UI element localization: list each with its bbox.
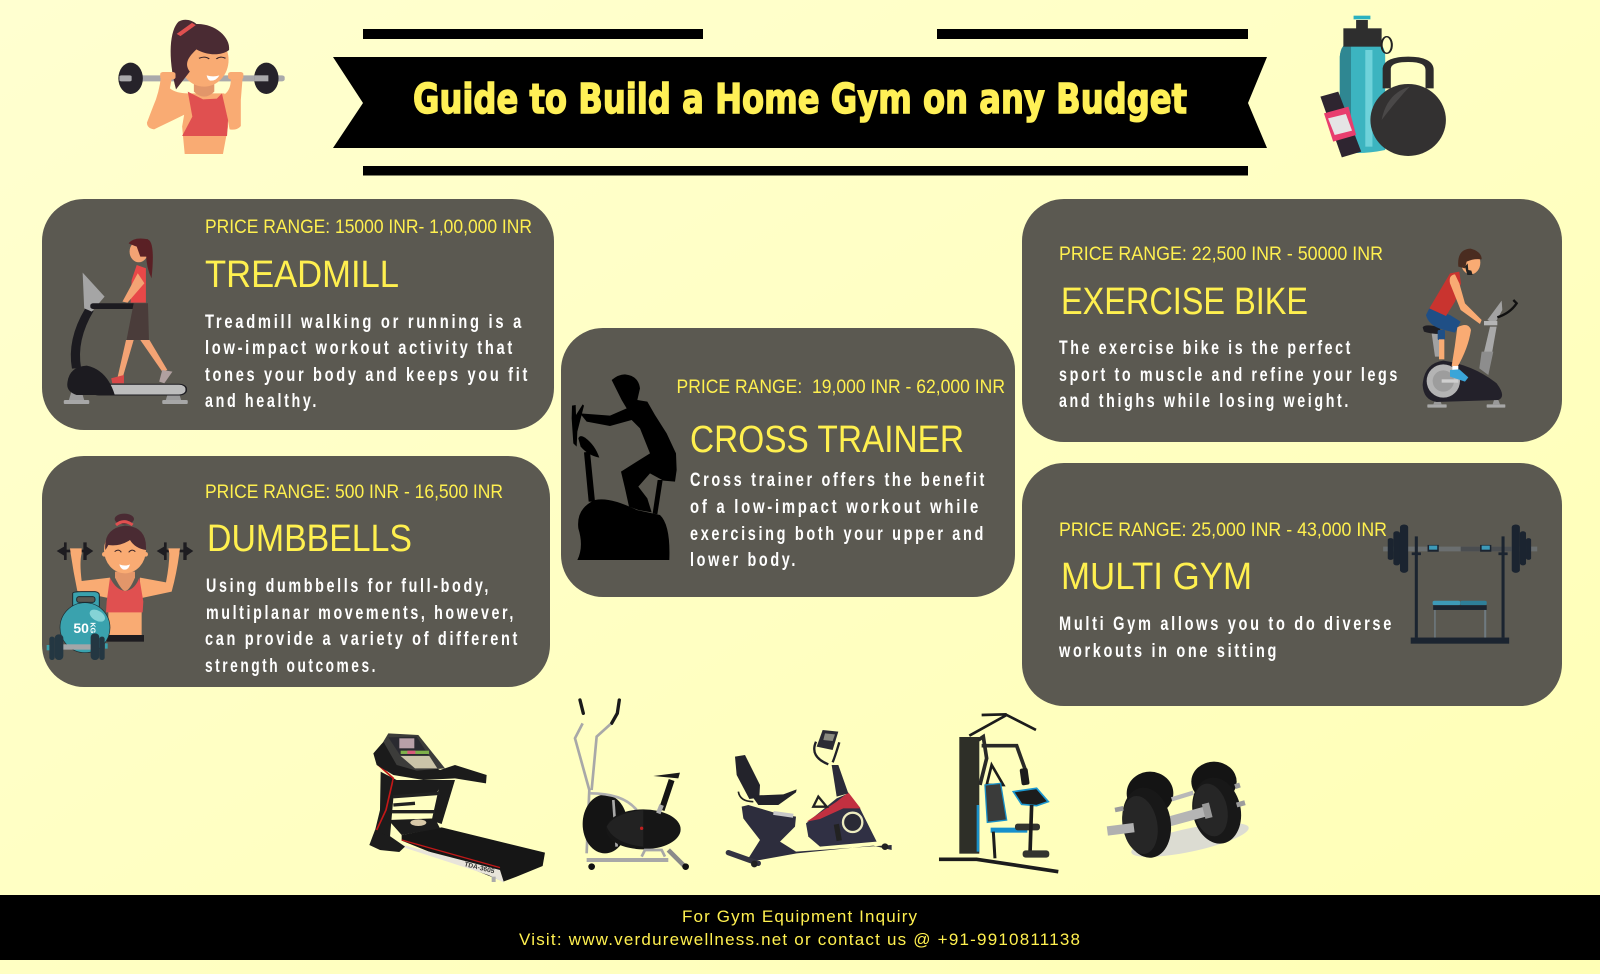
photo: home multi gym: [939, 714, 1058, 872]
photo: elliptical cross trainer: [575, 700, 689, 870]
icon: woman with dumbbells and kettlebell: 50: [73, 620, 89, 636]
description: multiplanar movements, however,: [206, 603, 516, 624]
description: The exercise bike is the perfect: [1059, 338, 1353, 359]
heading: MULTI GYM: [1061, 556, 1252, 598]
title: Guide to Build a Home Gym on any Budget: [413, 75, 1187, 123]
description: Cross trainer offers the benefit: [690, 470, 987, 491]
photo: pair of dumbbells: [1107, 762, 1251, 864]
price range: PRICE RANGE: 25,000 INR - 43,000 INR: [1059, 520, 1387, 541]
description: of a low-impact workout while: [690, 497, 981, 518]
description: [1059, 338, 1400, 412]
footer text: [519, 907, 1081, 949]
description: Using dumbbells for full-body,: [206, 576, 491, 597]
description: [690, 470, 987, 571]
price range: PRICE RANGE: 15000 INR- 1,00,000 INR: [205, 217, 532, 238]
icon: woman with dumbbells and kettlebell: [47, 514, 193, 660]
description: exercising both your upper and: [690, 524, 986, 545]
photo: treadmill: TDA-3605: [464, 861, 495, 875]
heading: DUMBBELLS: [207, 518, 412, 560]
panel: exercise bike: [1022, 199, 1562, 442]
description: Treadmill walking or running is a: [205, 312, 524, 333]
photo: treadmill: [369, 733, 545, 883]
description: [205, 576, 520, 677]
heading: TREADMILL: [205, 254, 399, 296]
price range: PRICE RANGE: 19,000 INR - 62,000 INR: [676, 377, 1005, 398]
description: [205, 312, 530, 412]
description: workouts in one sitting: [1058, 641, 1279, 662]
footer: contact bar: [0, 895, 1600, 960]
panel: dumbbells: [42, 456, 550, 687]
description: and healthy.: [205, 391, 319, 412]
description: sport to muscle and refine your legs: [1059, 365, 1400, 386]
description: can provide a variety of different: [205, 629, 520, 650]
price range: PRICE RANGE: 500 INR - 16,500 INR: [205, 482, 503, 503]
description: lower body.: [690, 550, 798, 571]
icon: woman with dumbbells and kettlebell: KG: [89, 622, 98, 634]
icon: woman lifting barbell: [118, 20, 285, 154]
footer text: For Gym Equipment Inquiry: [682, 907, 918, 926]
panel: multi gym: [1022, 463, 1562, 706]
title banner: [333, 29, 1267, 176]
description: low-impact workout activity that: [205, 338, 515, 359]
footer text: Visit: www.verdurewellness.net or contact us @ +91-9910811138: [519, 930, 1081, 949]
description: and thighs while losing weight.: [1059, 391, 1351, 412]
icon: barbell rack and bench: [1383, 524, 1537, 644]
description: [1058, 614, 1394, 662]
description: strength outcomes.: [205, 656, 378, 677]
photo: recumbent bike: [728, 730, 892, 867]
icon: water bottle, kettlebell and watch: [1320, 16, 1446, 157]
description: Multi Gym allows you to do diverse: [1059, 614, 1394, 635]
description: tones your body and keeps you fit: [205, 365, 530, 386]
heading: EXERCISE BIKE: [1061, 281, 1308, 323]
icon: man on exercise bike: [1423, 249, 1517, 408]
heading: CROSS TRAINER: [690, 419, 964, 461]
icon: cross trainer silhouette: [572, 374, 677, 560]
panel: treadmill: [42, 199, 554, 430]
icon: woman on treadmill: [64, 239, 188, 404]
price range: PRICE RANGE: 22,500 INR - 50000 INR: [1059, 244, 1383, 265]
panel: cross trainer: [561, 328, 1015, 597]
